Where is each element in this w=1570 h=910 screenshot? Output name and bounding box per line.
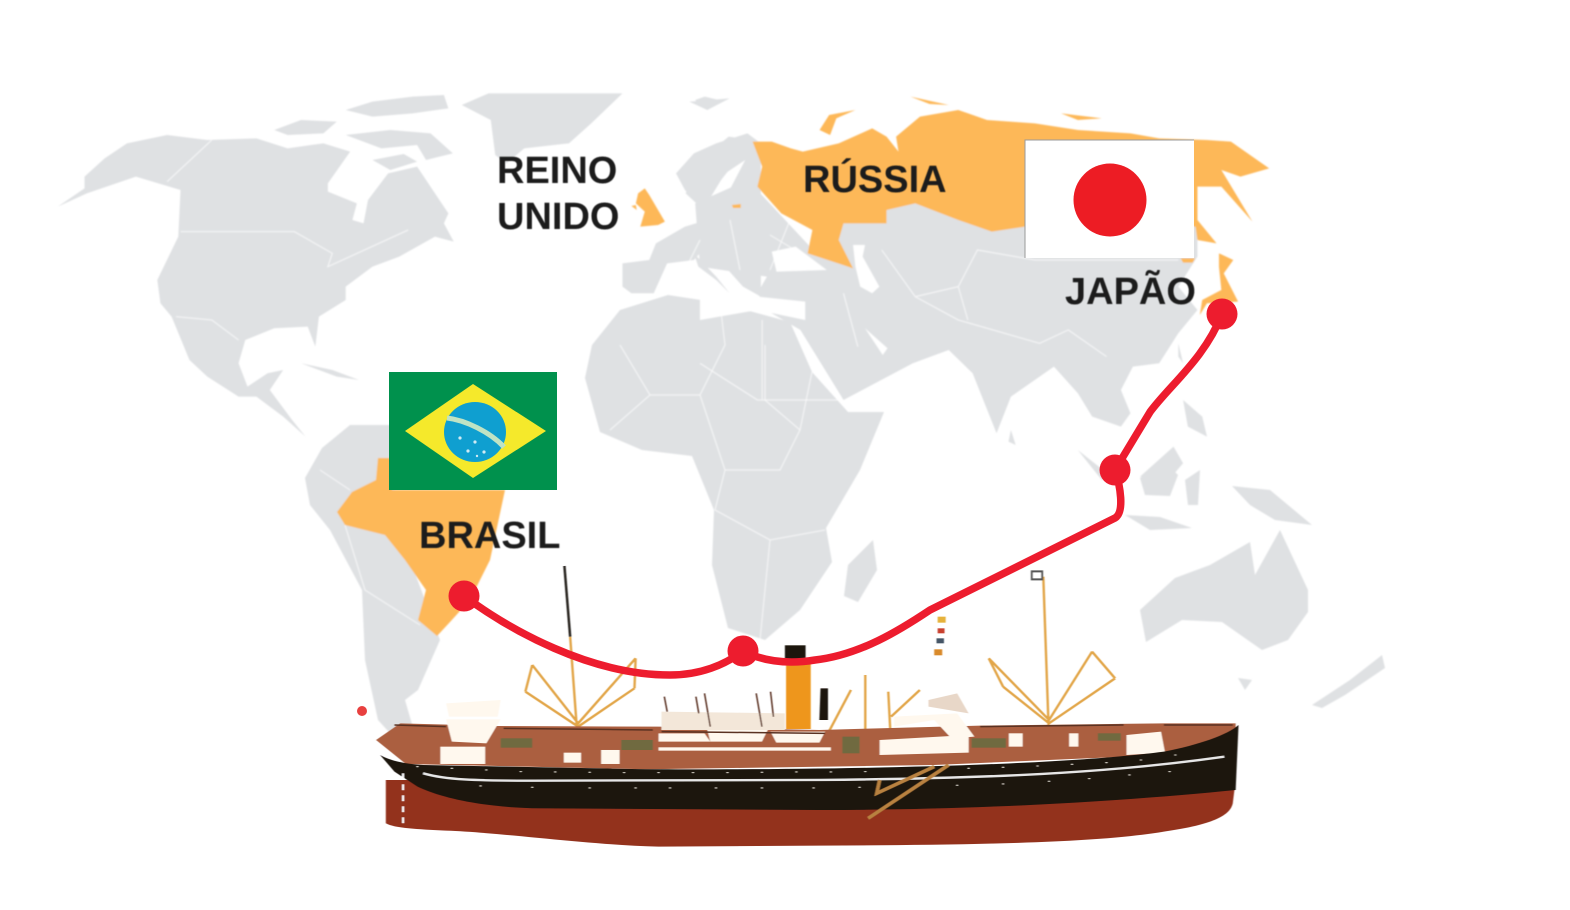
ship: white deck houses <box>440 693 1165 764</box>
small red marker <box>357 706 367 716</box>
ship: cargo hatches <box>501 733 1121 753</box>
label: Reino Unido: UNIDO <box>497 196 619 238</box>
country highlight: Russia <box>753 97 1269 268</box>
ship model <box>376 566 1239 847</box>
landmass: Americas and Arctic <box>58 93 730 437</box>
ship: red lower hull <box>386 780 1236 847</box>
seas: inland waters cut from the land <box>700 245 887 400</box>
route stop: Brazil <box>448 580 480 612</box>
label: Brasil: BRASIL <box>419 515 560 557</box>
label: Rússia: RÚSSIA <box>803 157 947 201</box>
country highlight: Japan <box>1181 220 1238 315</box>
ship: white sheer line <box>423 757 1224 781</box>
ship: rigging, masts and derricks <box>525 577 1115 747</box>
flag: Japan <box>1025 140 1194 258</box>
route line <box>464 314 1222 675</box>
country highlight: Brazil <box>337 458 505 636</box>
landmass: Madagascar <box>844 540 877 602</box>
route stop: Japan <box>1206 298 1238 330</box>
ship: black hull band <box>380 725 1239 810</box>
landmass: Indonesia and Oceania <box>1125 462 1385 708</box>
landmass: Africa <box>585 295 884 640</box>
flag: Brazil <box>389 372 557 490</box>
ship: mast pennant <box>1032 571 1042 579</box>
ship: signal flags <box>934 617 946 655</box>
route stop: Cape Town <box>728 636 758 666</box>
ship: deck and superstructure base <box>376 723 1236 769</box>
landmass: Asia <box>686 97 1207 480</box>
ship: funnel <box>785 645 828 729</box>
ship: rudder mark <box>402 773 404 825</box>
landmass: Europe and Scandinavia <box>622 133 761 297</box>
route stop: Singapore <box>1100 454 1130 486</box>
world map <box>58 93 1385 745</box>
country borders <box>167 140 1178 640</box>
landmass: South America <box>305 425 440 745</box>
label: Japão: JAPÃO <box>1065 269 1196 313</box>
label: Reino Unido: REINO <box>497 150 617 192</box>
ship: portholes <box>416 754 1177 789</box>
country highlight: United Kingdom <box>631 188 741 227</box>
ship: boarding ladder <box>868 765 949 818</box>
ship: fore mast top <box>564 566 570 637</box>
ship: deck railing shadows <box>394 692 1233 733</box>
